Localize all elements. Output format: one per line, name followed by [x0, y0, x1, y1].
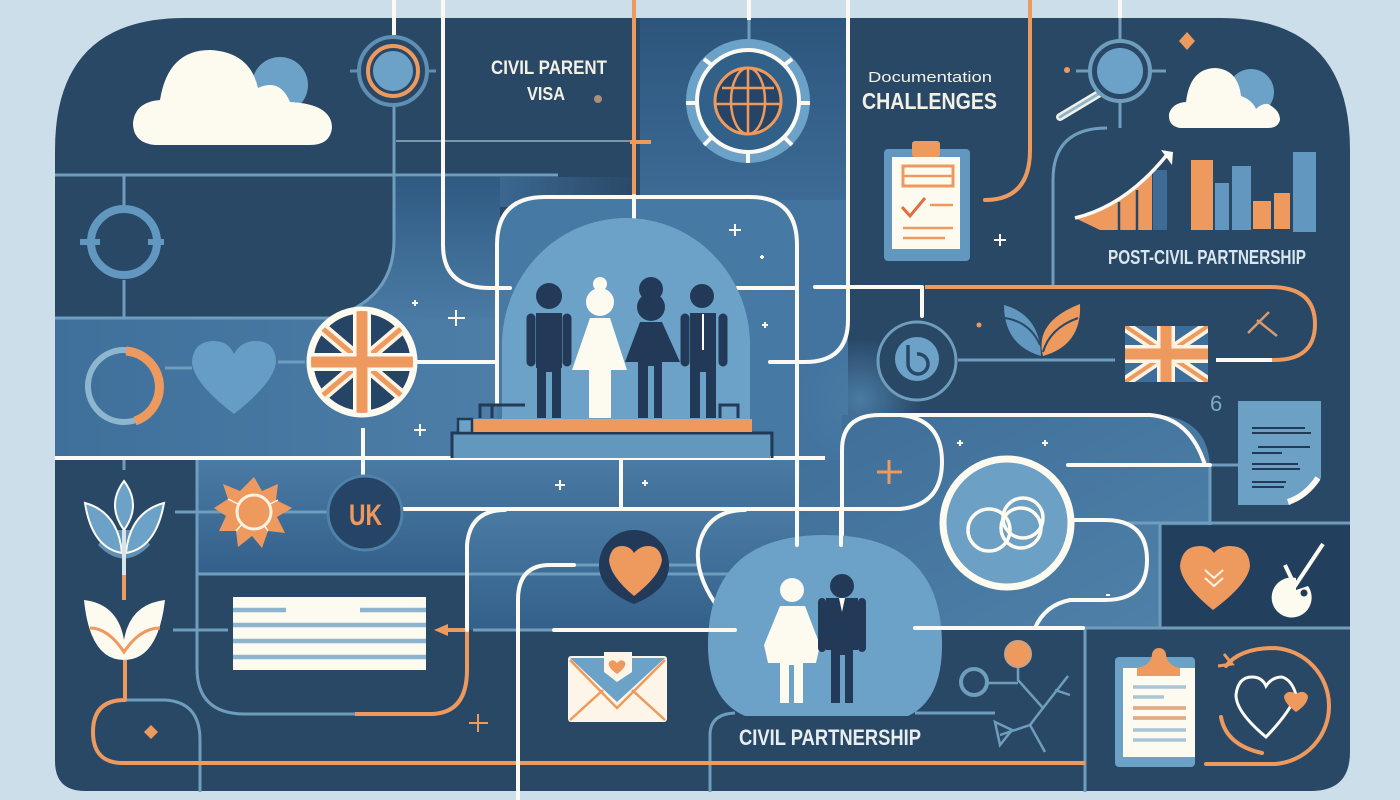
- faint horizontal rule: [396, 140, 632, 142]
- icon: leaf wings: [1004, 304, 1080, 356]
- text block: placeholder lines: [233, 597, 426, 670]
- woman: [764, 578, 820, 703]
- heading: post-civil partnership: POST-CIVIL PARTNERSHIP: [1108, 247, 1306, 269]
- icon: plus small orange: [469, 714, 488, 732]
- center group: couple: [708, 535, 942, 716]
- stage: [452, 405, 772, 458]
- icon: orange dot: [976, 322, 982, 328]
- icon: document: [1238, 401, 1321, 505]
- heading: civil parent visa: [491, 58, 607, 104]
- number six: 6: [1210, 391, 1222, 416]
- icon: white tulip: [84, 600, 165, 660]
- heading: documentation challenges: CHALLENGES: [862, 88, 997, 114]
- icon: heart badge: [599, 530, 669, 604]
- icon: sparkle diamond: [1179, 32, 1195, 50]
- icon: sun: [214, 477, 292, 548]
- icon: crosshair ring: [80, 209, 164, 275]
- heading: civil parent visa: CIVIL PARENT: [491, 58, 607, 79]
- heading: documentation challenges: Documentation: [868, 69, 992, 86]
- center group: family on a stage: [452, 218, 772, 458]
- arrow: orange pointer: [434, 624, 448, 636]
- icon: magnifier: [1060, 0, 1166, 117]
- badge: UK: UK: [349, 499, 382, 532]
- person 2: [572, 277, 627, 418]
- icon: cloud top-left: [133, 50, 332, 145]
- chart: growth area and bars: [1075, 150, 1316, 232]
- man: [822, 574, 862, 703]
- icon: cloud top-right: [1169, 68, 1280, 128]
- icon: union flag small: [1125, 326, 1208, 382]
- heading: civil parent visa: VISA: [527, 84, 565, 104]
- mid-blue zones: [55, 18, 1350, 630]
- icon: union flag circle: [308, 308, 416, 416]
- icon: heart in orange loop: [1206, 648, 1329, 764]
- heading: documentation challenges: [862, 69, 997, 114]
- icon: plus orange: [877, 460, 902, 484]
- icon: progress ring: [88, 350, 160, 422]
- heading: civil partnership: CIVIL PARTNERSHIP: [739, 725, 921, 750]
- icon: globe: [686, 39, 810, 163]
- icon: swirl circle: [878, 322, 956, 400]
- stub lines over couple bubble: [710, 510, 940, 630]
- icon: caret mark: [1248, 312, 1277, 336]
- icon: interlocking rings: [943, 459, 1071, 587]
- icon: target top: [350, 37, 436, 105]
- icon: branch with flowers: [961, 641, 1070, 752]
- badge: UK: [328, 476, 402, 550]
- person 3: [625, 277, 680, 418]
- icon: clipboard lower: [1115, 648, 1195, 767]
- icon: clipboard: [884, 141, 970, 261]
- icon: heart: [192, 341, 276, 414]
- person 1: [531, 283, 567, 418]
- icon: envelope: [568, 652, 667, 722]
- icon: heart check panel: [1180, 544, 1323, 618]
- sparkles: [412, 224, 1110, 595]
- spotlight: [502, 218, 750, 420]
- icon: lotus flower: [85, 481, 164, 600]
- person 4: [685, 284, 723, 418]
- icon: orange diamond: [144, 725, 158, 739]
